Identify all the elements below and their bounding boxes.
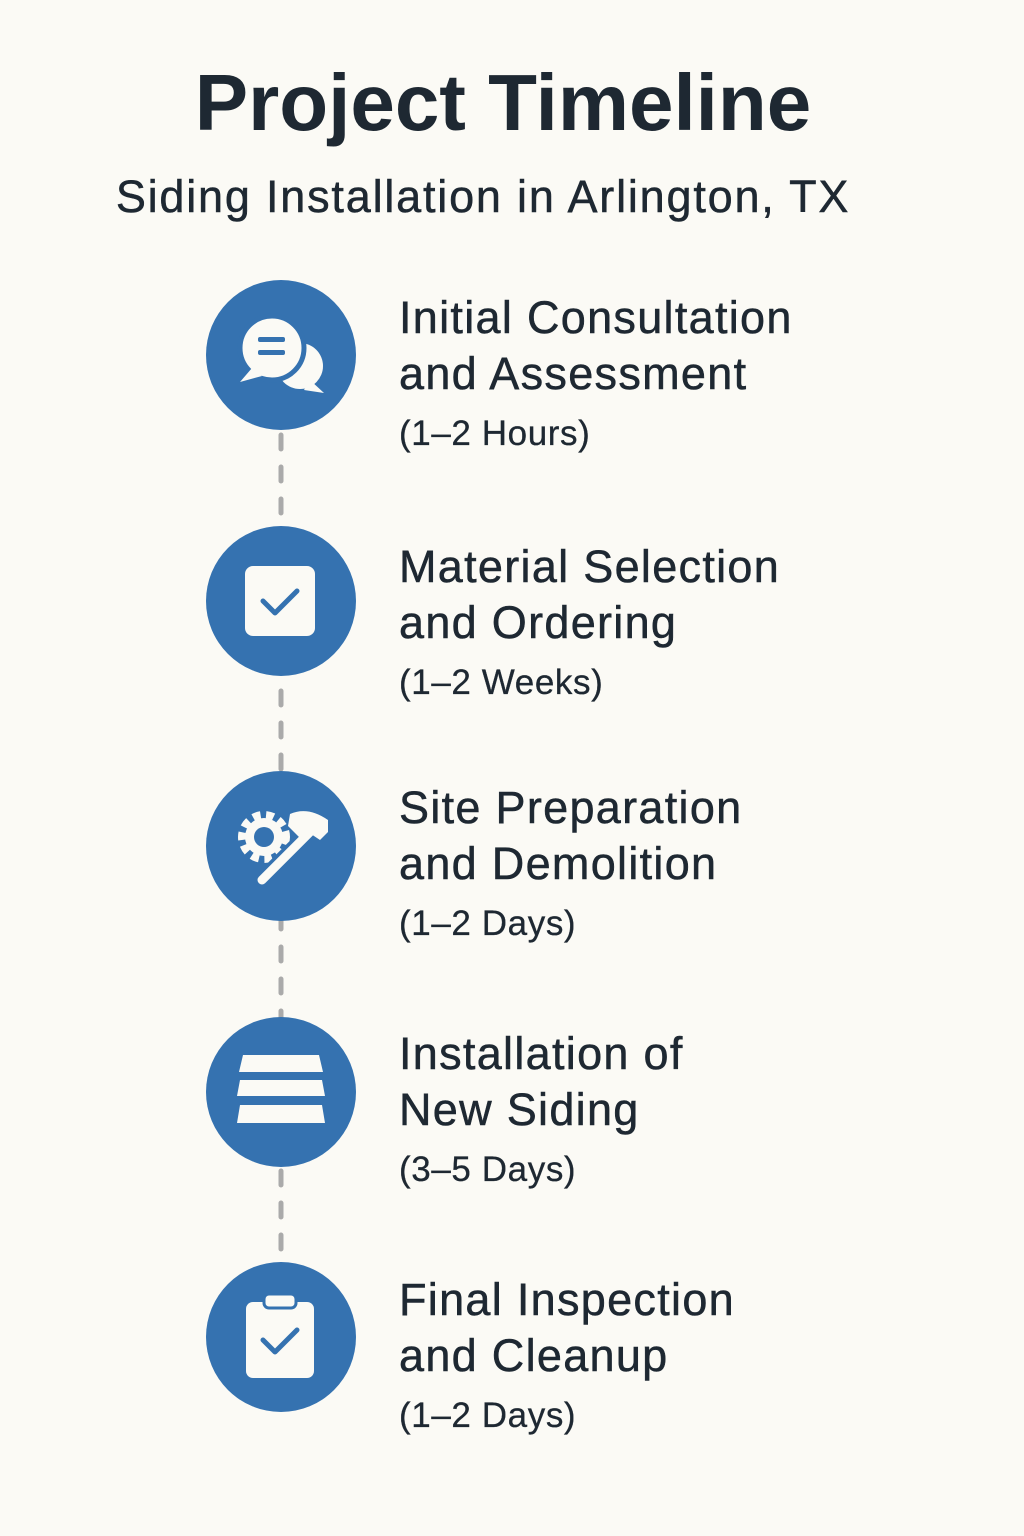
- subtitle: Siding Installation in Arlington, TX: [116, 171, 850, 222]
- step 4 text: New Siding: [399, 1084, 640, 1135]
- step 5 text: [399, 1274, 735, 1435]
- step 2 text: Material Selection: [399, 541, 780, 592]
- step 4 text: [399, 1028, 684, 1189]
- icon: chat bubbles: [206, 280, 356, 430]
- connector line: [278, 435, 284, 1260]
- step 2 text: [399, 541, 780, 702]
- step 1 text: Initial Consultation: [399, 292, 793, 343]
- step 4 text: Installation of: [399, 1028, 684, 1079]
- step 2 text: (1–2 Weeks): [399, 663, 603, 702]
- step 3 text: and Demolition: [399, 838, 717, 889]
- step 5 text: and Cleanup: [399, 1330, 669, 1381]
- step 4 text: (3–5 Days): [399, 1150, 576, 1189]
- step 5 text: Final Inspection: [399, 1274, 735, 1325]
- step 3 text: (1–2 Days): [399, 904, 576, 943]
- icon: siding layers: [206, 1017, 356, 1167]
- title: Project Timeline: [195, 58, 811, 147]
- step 5 text: (1–2 Days): [399, 1396, 576, 1435]
- step 1 text: and Assessment: [399, 348, 747, 399]
- icon: clipboard: [206, 1262, 356, 1412]
- step 2 text: and Ordering: [399, 597, 677, 648]
- icon: checkbox: [206, 526, 356, 676]
- icon: gear and hammer: [206, 771, 356, 921]
- step 3 text: [399, 782, 742, 943]
- step 1 text: (1–2 Hours): [399, 414, 590, 453]
- step 3 text: Site Preparation: [399, 782, 742, 833]
- step 1 text: [399, 292, 793, 453]
